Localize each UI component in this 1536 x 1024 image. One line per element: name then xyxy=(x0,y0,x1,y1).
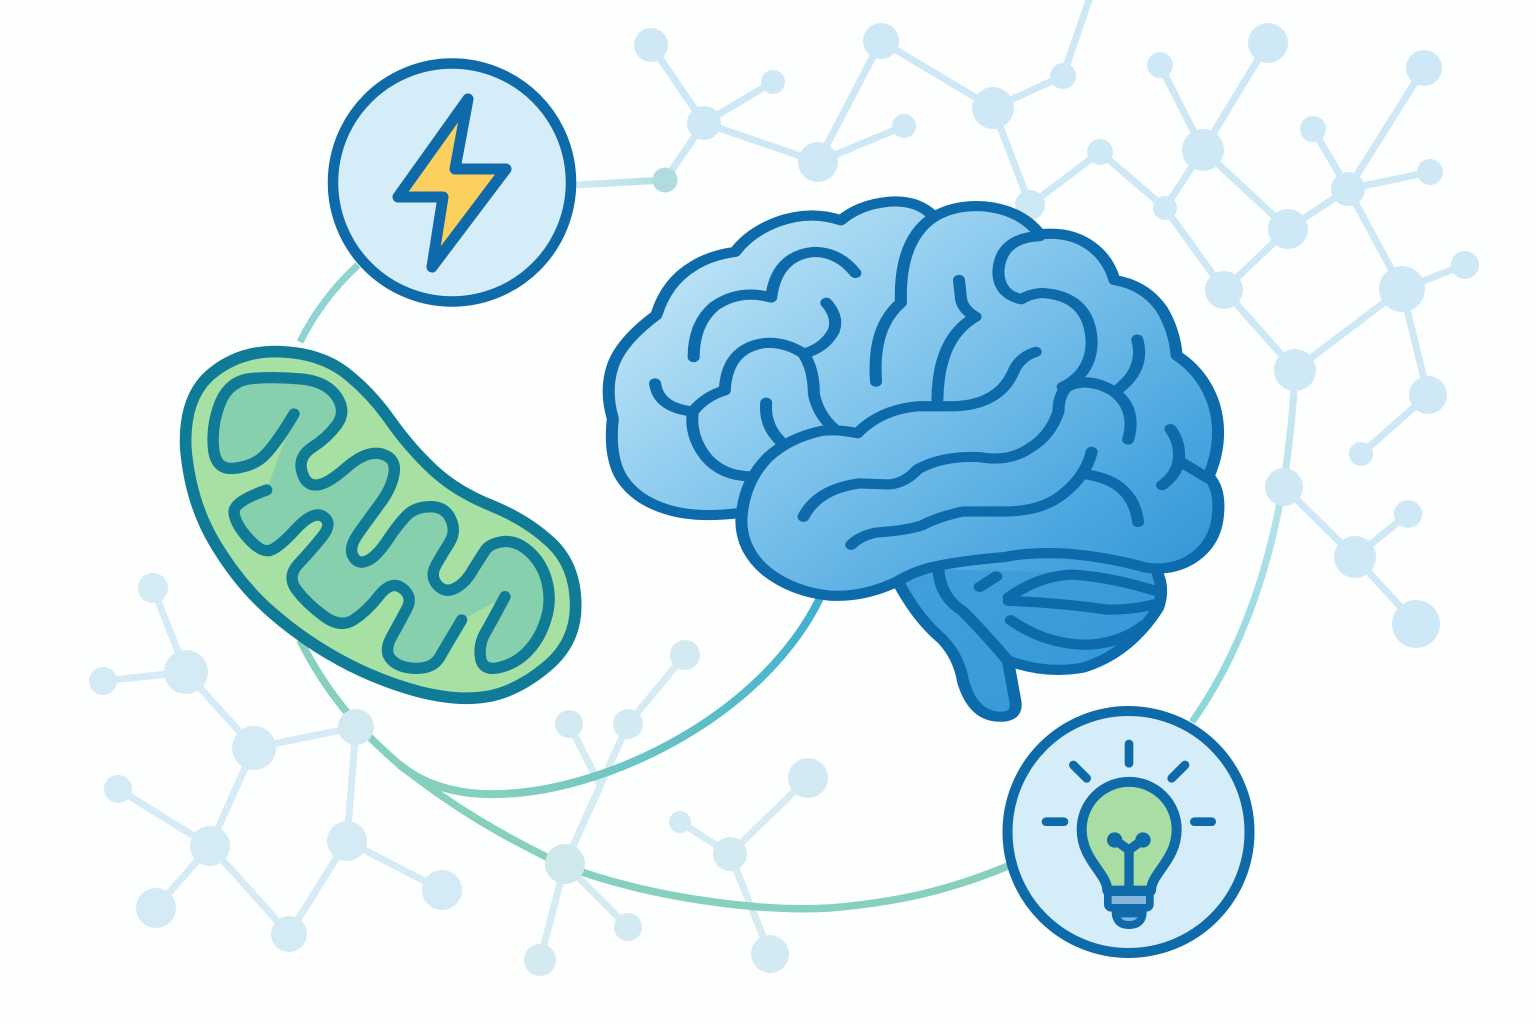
molecular network: lower left xyxy=(89,573,462,952)
cerebrum outline xyxy=(609,201,1218,515)
connector: brain to mitochondrion arc xyxy=(400,598,820,794)
bulb rays xyxy=(1046,744,1212,822)
mitochondrion cristae upper xyxy=(213,378,549,668)
brain silhouette fill xyxy=(609,201,1218,717)
filament xyxy=(1115,840,1143,890)
molecular network: lower middle xyxy=(524,640,828,976)
mitochondrion xyxy=(186,352,576,698)
icon: light bulb xyxy=(1046,744,1212,925)
cerebellum and brainstem outline xyxy=(899,569,1161,717)
network junction nodes on the arcs xyxy=(338,349,1316,884)
connector: light bulb to network xyxy=(1192,370,1295,722)
bulb base xyxy=(1107,891,1151,909)
icon circle: energy bolt xyxy=(333,64,571,302)
brain sulci xyxy=(655,217,1208,545)
connector: mitochondrion to light bulb xyxy=(300,640,1008,909)
connector: energy icon to mitochondrion xyxy=(300,265,358,342)
icon: lightning bolt xyxy=(398,99,506,267)
bulb cap xyxy=(1116,913,1143,925)
mitochondrion outer membrane xyxy=(186,352,576,698)
mitochondrion matrix xyxy=(213,378,549,668)
bulb glass xyxy=(1082,782,1177,891)
temporal lobe outline xyxy=(741,352,1218,596)
connector: energy icon to network node xyxy=(575,168,678,192)
bulb base highlight xyxy=(1112,896,1146,904)
molecular network: top right xyxy=(634,0,1479,648)
brain xyxy=(609,201,1218,717)
icon circle: light bulb xyxy=(1008,711,1250,953)
mitochondrion cristae lower xyxy=(234,490,462,668)
cerebellum fill xyxy=(899,569,1161,717)
